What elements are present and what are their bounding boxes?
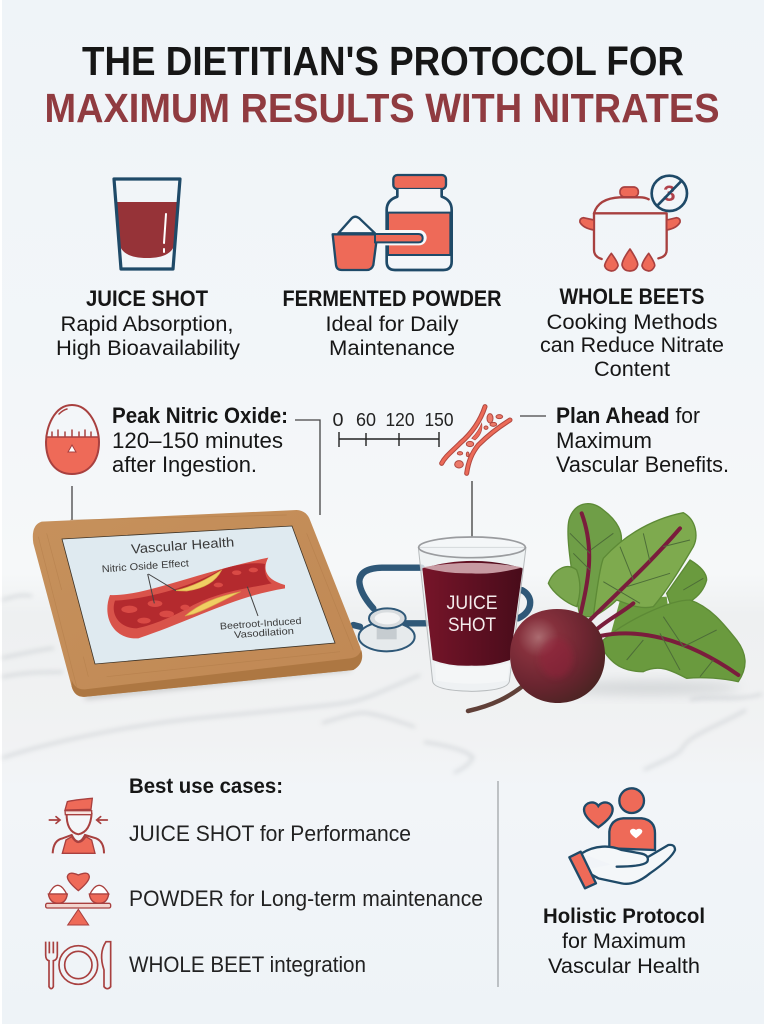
icon: blood vessel (442, 407, 510, 473)
juice shot description: High Bioavailability (56, 336, 240, 360)
title: MAXIMUM RESULTS WITH NITRATES (44, 85, 720, 131)
heading: whole beets: WHOLE BEETS (560, 284, 704, 309)
holistic protocol text: Holistic Protocol (543, 905, 705, 928)
panel: fermented powder (282, 175, 502, 360)
row: powder for long-term maintenance (46, 873, 483, 925)
whole beets description: Content (594, 357, 670, 381)
glass label (446, 593, 498, 636)
row: juice shot for performance (49, 798, 411, 853)
tablet screen (62, 526, 335, 664)
glass label: JUICE (446, 593, 498, 614)
photo: shot glass of juice (418, 537, 526, 691)
label: POWDER for Long-term maintenance (129, 886, 483, 911)
holistic protocol text: for Maximum (562, 930, 686, 953)
photo: beetroot (468, 609, 605, 711)
whole beets description (540, 310, 724, 381)
vessel illustration: Vascular Health (131, 534, 235, 557)
panel: whole beets (540, 176, 724, 381)
chart: minutes timeline: 0 (332, 409, 344, 430)
icon: cooking pot with no-3 badge (580, 176, 687, 271)
chart: minutes timeline (332, 409, 454, 447)
icon: plate and cutlery (46, 942, 111, 989)
vessel illustration: Beetroot-Induced (220, 616, 302, 632)
chart: minutes timeline: 150 (424, 409, 454, 430)
title: THE DIETITIAN'S PROTOCOL FOR (82, 38, 684, 84)
vessel illustration (101, 534, 302, 641)
heading: best use cases: Best use cases: (129, 775, 283, 798)
peak nitric oxide text: 120–150 minutes (112, 428, 283, 453)
divider (497, 781, 499, 987)
icon: balance scale with heart (46, 873, 111, 925)
table shadows (85, 668, 740, 697)
label: WHOLE BEET integration (129, 952, 366, 977)
icon: hand holding person and heart (569, 788, 675, 888)
plan ahead text: Vascular Benefits. (556, 452, 729, 477)
icon: juice glass (114, 179, 180, 269)
icon: egg timer (46, 405, 99, 474)
plan ahead text (556, 403, 729, 477)
heading: juice shot: JUICE SHOT (86, 286, 209, 311)
glass label: SHOT (448, 615, 496, 636)
photo: beet leaves (548, 504, 745, 682)
holistic protocol text (543, 905, 705, 978)
juice shot description (56, 312, 240, 360)
vessel illustration: Nitric Oside Effect (101, 558, 190, 575)
fermented powder description (326, 312, 459, 360)
icon: athlete (49, 798, 107, 853)
photo: tablet showing vascular health (33, 510, 362, 697)
panel: holistic protocol (543, 788, 705, 978)
leader lines (72, 416, 546, 537)
icon: powder jar and scoop (333, 175, 452, 270)
stethoscope (353, 568, 530, 651)
panel: juice shot (56, 179, 240, 360)
whole beets description: Cooking Methods (546, 310, 718, 334)
label: JUICE SHOT for Performance (129, 821, 411, 846)
title (44, 38, 720, 131)
juice shot description: Rapid Absorption, (60, 312, 234, 336)
peak nitric oxide text: Peak Nitric Oxide: (112, 403, 288, 428)
plan ahead text: Maximum (556, 428, 652, 453)
whole beets description: can Reduce Nitrate (540, 333, 724, 357)
chart: minutes timeline: 120 (386, 409, 414, 430)
peak nitric oxide text (112, 403, 288, 477)
fermented powder description: Maintenance (329, 336, 455, 360)
chart: minutes timeline: 60 (356, 409, 376, 430)
heading: fermented powder: FERMENTED POWDER (282, 286, 502, 311)
holistic protocol text: Vascular Health (548, 955, 700, 978)
peak nitric oxide text: after Ingestion. (112, 452, 257, 477)
icon: cooking pot with no-3 badge: 3 (663, 181, 675, 206)
vessel illustration: Vasodilation (234, 626, 294, 641)
plan ahead text: Plan Ahead for (556, 403, 700, 428)
row: whole beet integration (46, 942, 366, 989)
panel: peak nitric oxide (46, 403, 288, 477)
fermented powder description: Ideal for Daily (326, 312, 459, 336)
